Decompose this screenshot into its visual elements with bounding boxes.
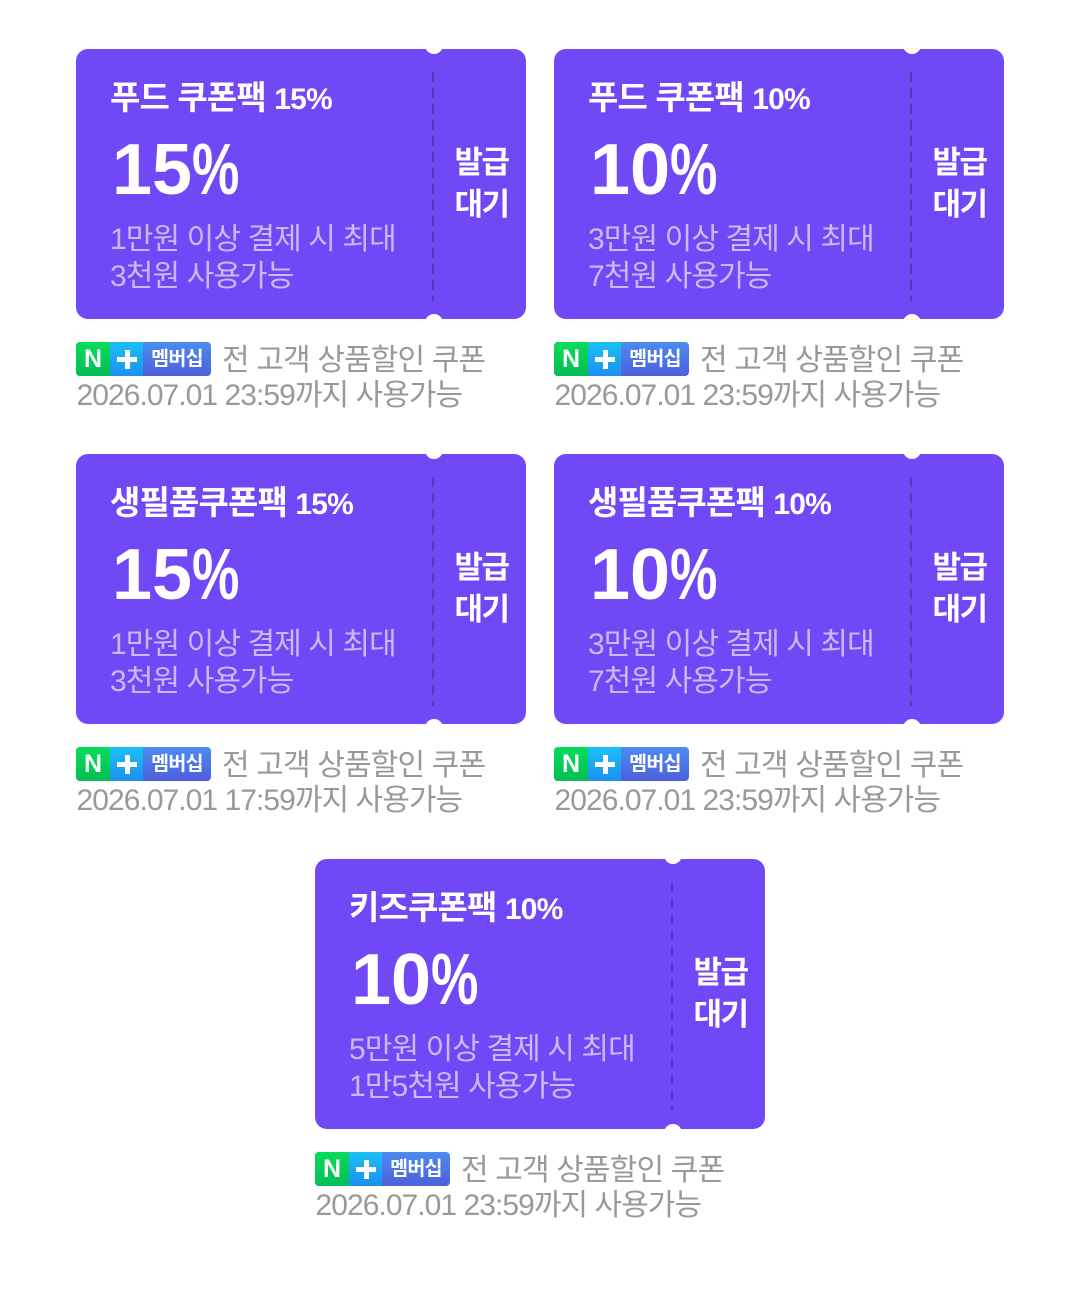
status: [932, 550, 987, 627]
badge: N+ membership: 멤버십: [151, 348, 203, 370]
conditions: 3만원 이상 결제 시 최대: [588, 628, 874, 661]
target label: 전 고객 상품할인 쿠폰: [700, 749, 963, 782]
target label: 전 고객 상품할인 쿠폰: [461, 1154, 724, 1187]
ticket panel: [76, 454, 526, 724]
conditions: [349, 1033, 635, 1103]
expiry: 2026.07.01 23:59까지 사용가능: [554, 379, 940, 412]
status: 발급: [932, 145, 987, 180]
status: 대기: [454, 592, 509, 627]
discount: 15: [112, 130, 192, 210]
discount: %: [192, 130, 239, 210]
badge: N+ membership: 멤버십: [151, 753, 203, 775]
status: [454, 145, 509, 222]
conditions: 1만원 이상 결제 시 최대: [110, 628, 396, 661]
conditions: 1만원 이상 결제 시 최대: [110, 223, 396, 256]
expiry: 2026.07.01 23:59까지 사용가능: [76, 379, 462, 412]
badge: N+ membership: N: [84, 345, 102, 373]
title: 푸드 쿠폰팩 10%: [588, 79, 810, 116]
discount: [590, 130, 717, 210]
status: [932, 145, 987, 222]
discount: [112, 130, 239, 210]
status: 발급: [454, 550, 509, 585]
badge: N+ membership: N: [84, 750, 102, 778]
badge: N+ membership: [315, 1152, 450, 1186]
conditions: [588, 628, 874, 698]
coupon: food pack 10%: [554, 49, 1004, 412]
discount: [351, 940, 478, 1020]
status: 대기: [932, 592, 987, 627]
target label: 전 고객 상품할인 쿠폰: [700, 344, 963, 377]
badge: N+ membership: N: [323, 1155, 341, 1183]
badge: N+ membership: 멤버십: [629, 348, 681, 370]
target label: 전 고객 상품할인 쿠폰: [222, 344, 485, 377]
conditions: 3천원 사용가능: [110, 260, 293, 293]
status: [693, 955, 748, 1032]
coupon: kids pack 10%: [315, 859, 765, 1222]
ticket panel: [76, 49, 526, 319]
status: 발급: [932, 550, 987, 585]
conditions: 7천원 사용가능: [588, 665, 771, 698]
discount: %: [670, 535, 717, 615]
badge: N+ membership: N: [562, 345, 580, 373]
badge: N+ membership: [554, 342, 689, 376]
discount: 15: [112, 535, 192, 615]
discount: [112, 535, 239, 615]
title: 키즈쿠폰팩 10%: [349, 889, 563, 926]
ticket panel: [554, 49, 1004, 319]
status: 대기: [693, 997, 748, 1032]
discount: %: [431, 940, 478, 1020]
discount: [590, 535, 717, 615]
expiry: 2026.07.01 23:59까지 사용가능: [316, 1189, 701, 1222]
status: 대기: [932, 187, 987, 222]
coupon: daily goods pack 10%: [554, 454, 1004, 817]
expiry: 2026.07.01 17:59까지 사용가능: [76, 784, 462, 817]
conditions: 1만5천원 사용가능: [349, 1070, 575, 1103]
conditions: [110, 223, 396, 293]
conditions: 7천원 사용가능: [588, 260, 771, 293]
discount: %: [192, 535, 239, 615]
title: 생필품쿠폰팩 15%: [110, 484, 353, 521]
ticket panel: [554, 454, 1004, 724]
conditions: 5만원 이상 결제 시 최대: [349, 1033, 635, 1066]
status: 발급: [454, 145, 509, 180]
badge: N+ membership: [76, 342, 211, 376]
badge: N+ membership: [554, 747, 689, 781]
target label: 전 고객 상품할인 쿠폰: [222, 749, 485, 782]
badge: N+ membership: [76, 747, 211, 781]
discount: 10: [590, 130, 670, 210]
badge: N+ membership: N: [562, 750, 580, 778]
badge: N+ membership: 멤버십: [390, 1158, 442, 1180]
discount: 10: [590, 535, 670, 615]
discount: %: [670, 130, 717, 210]
conditions: [110, 628, 396, 698]
coupon: food pack 15%: [76, 49, 526, 412]
conditions: [588, 223, 874, 293]
title: 푸드 쿠폰팩 15%: [110, 79, 332, 116]
expiry: 2026.07.01 23:59까지 사용가능: [554, 784, 940, 817]
badge: N+ membership: 멤버십: [629, 753, 681, 775]
coupon: daily goods pack 15%: [76, 454, 526, 817]
conditions: 3천원 사용가능: [110, 665, 293, 698]
ticket panel: [315, 859, 765, 1129]
conditions: 3만원 이상 결제 시 최대: [588, 223, 874, 256]
status: [454, 550, 509, 627]
status: 대기: [454, 187, 509, 222]
discount: 10: [351, 940, 431, 1020]
status: 발급: [693, 955, 748, 990]
title: 생필품쿠폰팩 10%: [588, 484, 831, 521]
